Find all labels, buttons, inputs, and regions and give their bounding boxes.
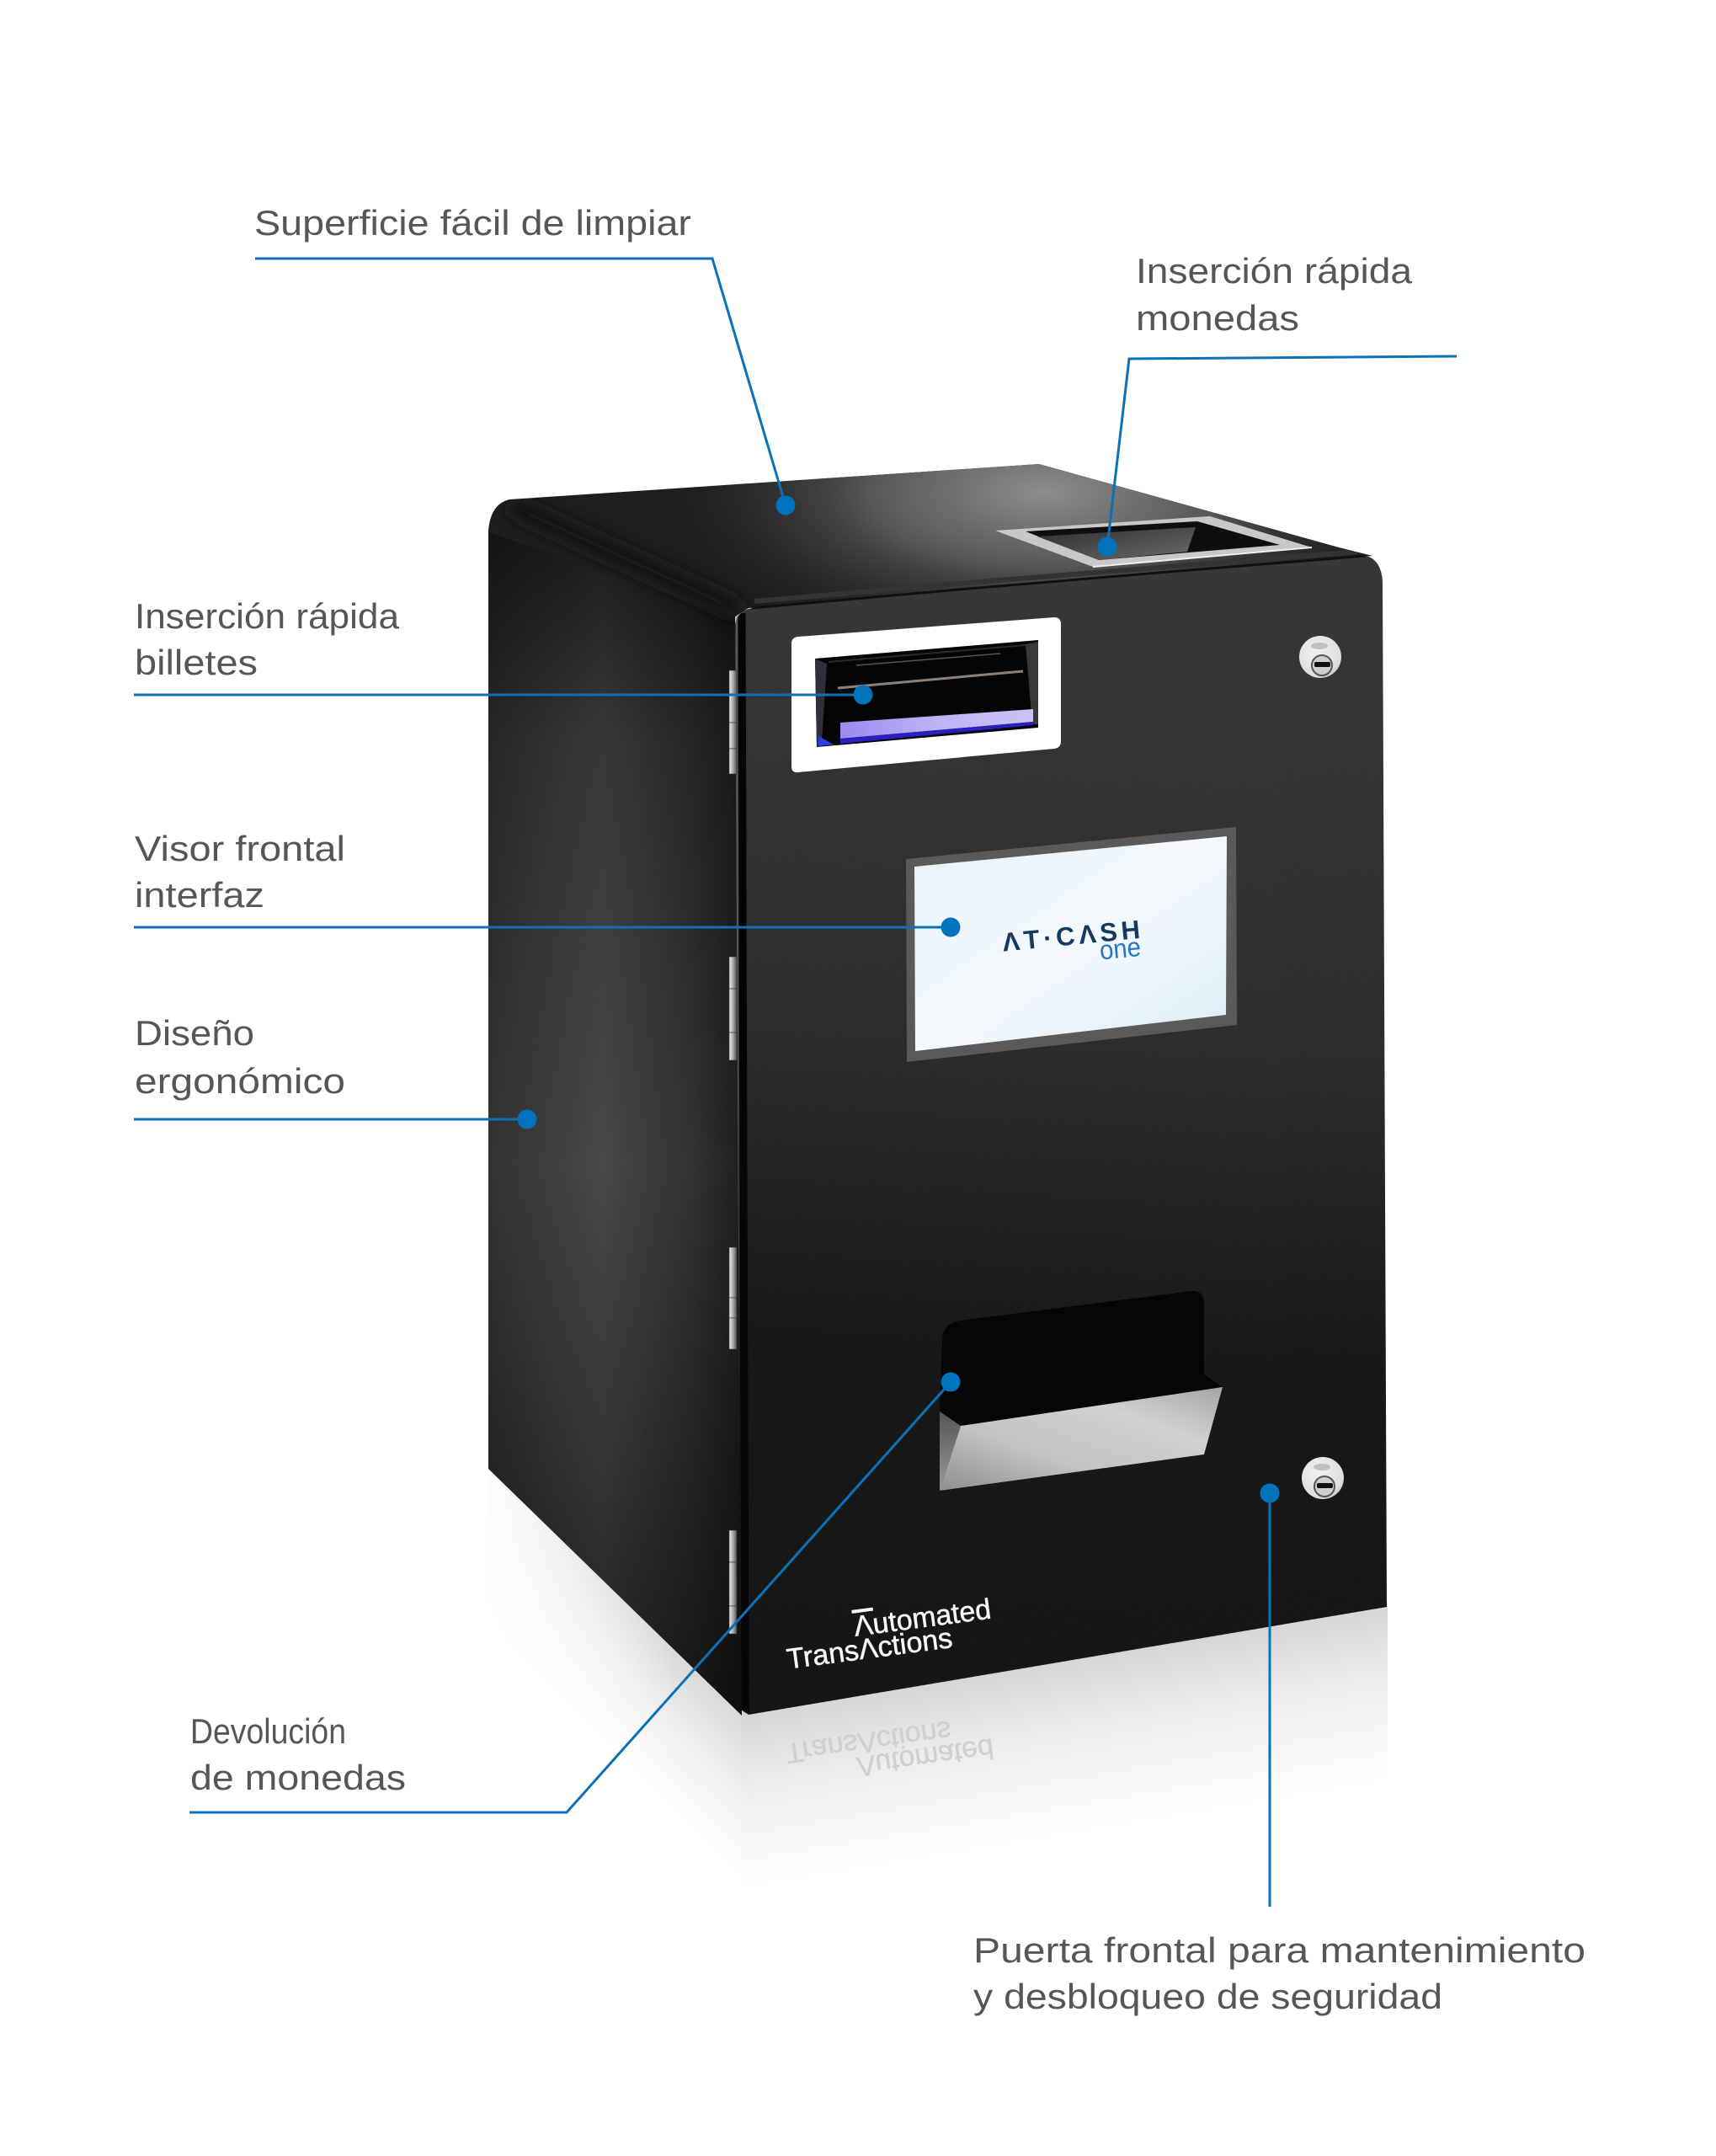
AT-CASH one logo: one: [1098, 931, 1142, 966]
cabinet side face: [484, 497, 745, 1718]
lock: lower: [1302, 1457, 1344, 1499]
callout: Visor frontal interfaz: Visor frontal: [135, 829, 345, 868]
coin return tray: [940, 1291, 1223, 1491]
callout: Diseño ergonómico: ergonómico: [135, 1061, 345, 1101]
reflected brand logo: Λutomated: [855, 1732, 996, 1783]
callout: Devolución de monedas: [189, 1373, 960, 1812]
callout: Inserción rápida monedas: Inserción rápida: [1136, 251, 1413, 291]
cabinet top face: [488, 464, 1372, 616]
brand logo: Automated TransActions: Λutomated: [852, 1593, 993, 1643]
banknote slot: [791, 617, 1061, 772]
callout: Superficie fácil de limpiar: [254, 203, 795, 515]
floor reflection: [488, 1469, 1388, 1903]
AT-CASH one logo: ΛT·CΛSH: [1001, 915, 1141, 958]
lock: upper: [1299, 636, 1341, 678]
callout: Inserción rápida billetes: billetes: [135, 643, 258, 682]
display screen: [906, 827, 1237, 1062]
callout: Visor frontal interfaz: [134, 829, 960, 937]
coin insertion hopper: [995, 516, 1312, 567]
callout: Inserción rápida monedas: [1098, 251, 1457, 556]
machine: AT-CASH one cabinet: [480, 455, 1394, 1726]
callout: Puerta frontal para mantenimiento y desbloqueo de seguridad: y desbloqueo de seguridad: [973, 1977, 1442, 2016]
callout: Devolución de monedas: de monedas: [190, 1758, 406, 1797]
callout: Inserción rápida monedas: monedas: [1136, 298, 1299, 338]
callout: Inserción rápida billetes: [134, 596, 872, 704]
callout: Superficie fácil de limpiar: Superficie fácil de limpiar: [254, 203, 691, 243]
callout: Visor frontal interfaz: interfaz: [135, 875, 264, 915]
callout: Devolución de monedas: Devolución: [190, 1711, 346, 1751]
top front rim: [752, 552, 1366, 608]
cabinet front door: [728, 547, 1394, 1726]
callout: Puerta frontal para mantenimiento y desbloqueo de seguridad: Puerta frontal para mantenimiento: [973, 1930, 1585, 1970]
callout: Puerta frontal para mantenimiento y desbloqueo de seguridad: [973, 1484, 1585, 2016]
AT-CASH one logo: [1001, 915, 1143, 974]
callout: Diseño ergonómico: [134, 1013, 537, 1129]
brand logo: Automated TransActions: [781, 1593, 996, 1676]
reflected brand logo: [784, 1715, 996, 1783]
callout: Inserción rápida billetes: Inserción rápida: [135, 596, 400, 636]
door hinges: [729, 670, 737, 1634]
soft seam between top and side: [510, 505, 741, 611]
callout: Diseño ergonómico: Diseño: [135, 1013, 254, 1053]
brand logo: Automated TransActions: TransΛctions: [785, 1622, 954, 1676]
reflected brand logo: TransΛctions: [784, 1715, 953, 1769]
